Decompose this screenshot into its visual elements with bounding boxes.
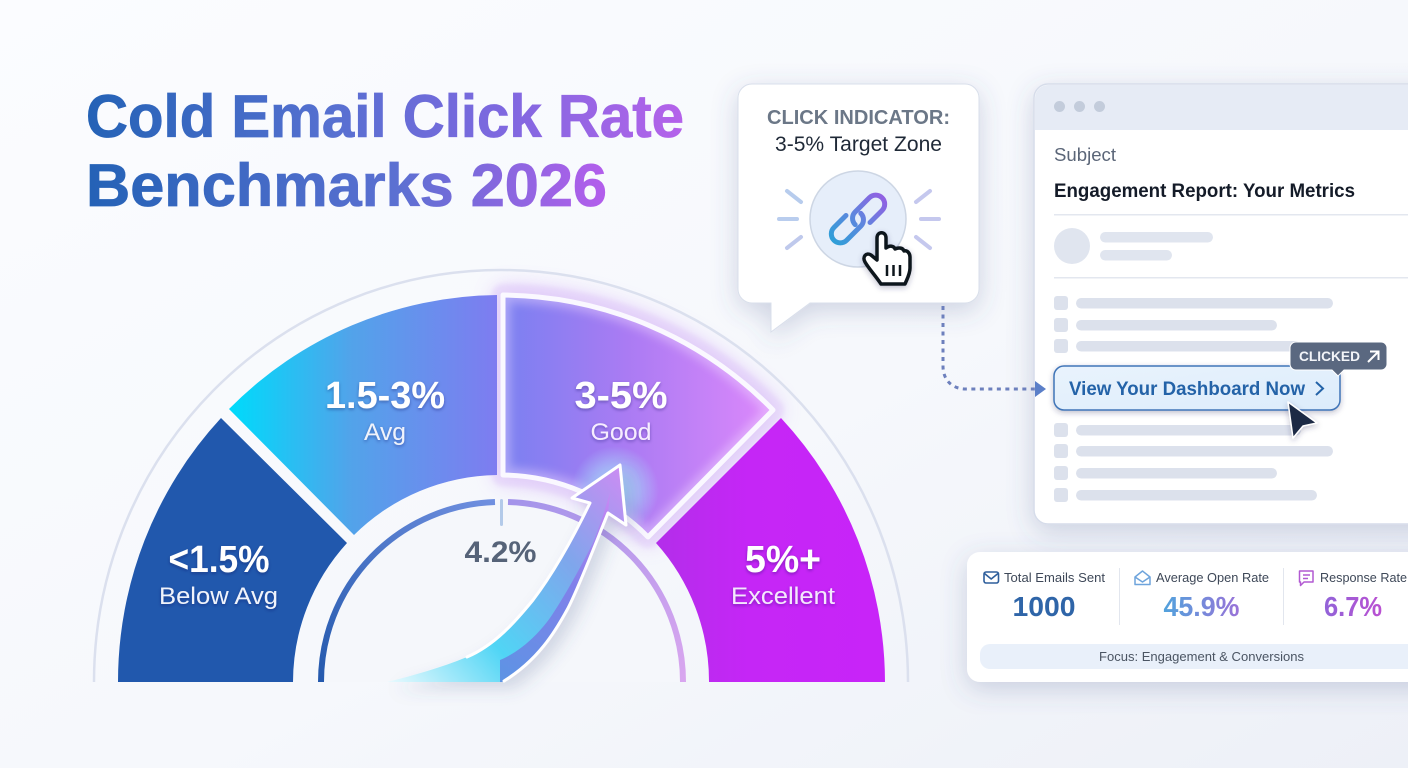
segment: excellent — [656, 418, 885, 682]
inner dial backdrop — [321, 502, 681, 682]
clicked badge — [1290, 342, 1387, 376]
segment: excellent: 5%+ — [745, 539, 821, 581]
segment: average — [229, 295, 497, 535]
subject line: Engagement Report: Your Metrics — [1054, 180, 1355, 202]
stat: average open rate: Average Open Rate — [1156, 570, 1269, 585]
value: 4.2%: 4.2% — [464, 536, 536, 569]
title — [86, 83, 684, 219]
glow behind good segment — [503, 295, 773, 537]
stat: total emails sent: 1000 — [1012, 591, 1076, 622]
segment: excellent: Excellent — [731, 583, 835, 610]
gauge — [94, 270, 908, 682]
email title bar — [1035, 85, 1408, 130]
callout: click indicator — [738, 84, 979, 332]
inner progress ring — [321, 502, 683, 682]
gauge outer thin arc — [94, 270, 908, 682]
segment: below average: <1.5% — [168, 539, 270, 581]
stat: total emails sent — [984, 570, 1105, 622]
subject label: Subject — [1054, 144, 1116, 165]
icon: link in circle — [810, 171, 906, 267]
cursor — [1288, 402, 1317, 438]
callout bubble — [738, 84, 979, 332]
needle tick — [500, 499, 503, 526]
dashed connector arrow — [943, 306, 1046, 397]
focus bar: Focus: Engagement & Conversions — [1099, 650, 1304, 664]
icon: hand pointer — [864, 233, 910, 284]
callout heading: CLICK INDICATOR: — [767, 107, 950, 129]
segment: average: Avg — [364, 419, 406, 446]
icon: sparkle rays — [779, 191, 939, 248]
stat: response rate: 6.7% — [1324, 591, 1382, 622]
segment: below average — [118, 418, 347, 682]
stat: average open rate — [1135, 570, 1269, 622]
focus bar — [980, 644, 1408, 669]
stat: total emails sent: Total Emails Sent — [1004, 570, 1105, 585]
call-to-action button: View Your Dashboard Now — [1069, 378, 1306, 400]
stat: response rate: Response Rate — [1320, 570, 1407, 585]
callout subheading: 3-5% Target Zone — [775, 133, 942, 156]
stats card — [967, 552, 1408, 682]
segment: good highlighted: Good — [590, 419, 652, 446]
clicked badge: CLICKED — [1299, 348, 1360, 364]
call-to-action button — [1054, 366, 1340, 410]
email window — [1034, 84, 1408, 524]
panel: email preview — [1034, 84, 1408, 524]
body placeholder lines — [1054, 296, 1333, 502]
trend arrow — [387, 465, 626, 682]
stat: response rate — [1300, 570, 1407, 622]
title: Benchmarks 2026 — [86, 152, 607, 219]
stat: average open rate: 45.9% — [1164, 591, 1240, 622]
segment: good highlighted: 3-5% — [574, 375, 668, 417]
segment: below average: Below Avg — [159, 583, 278, 610]
title: Cold Email Click Rate — [86, 83, 684, 150]
segment: average: 1.5-3% — [325, 375, 445, 417]
panel: stats — [967, 552, 1408, 682]
sender placeholder — [1054, 228, 1213, 264]
segment: good highlighted — [503, 295, 773, 537]
